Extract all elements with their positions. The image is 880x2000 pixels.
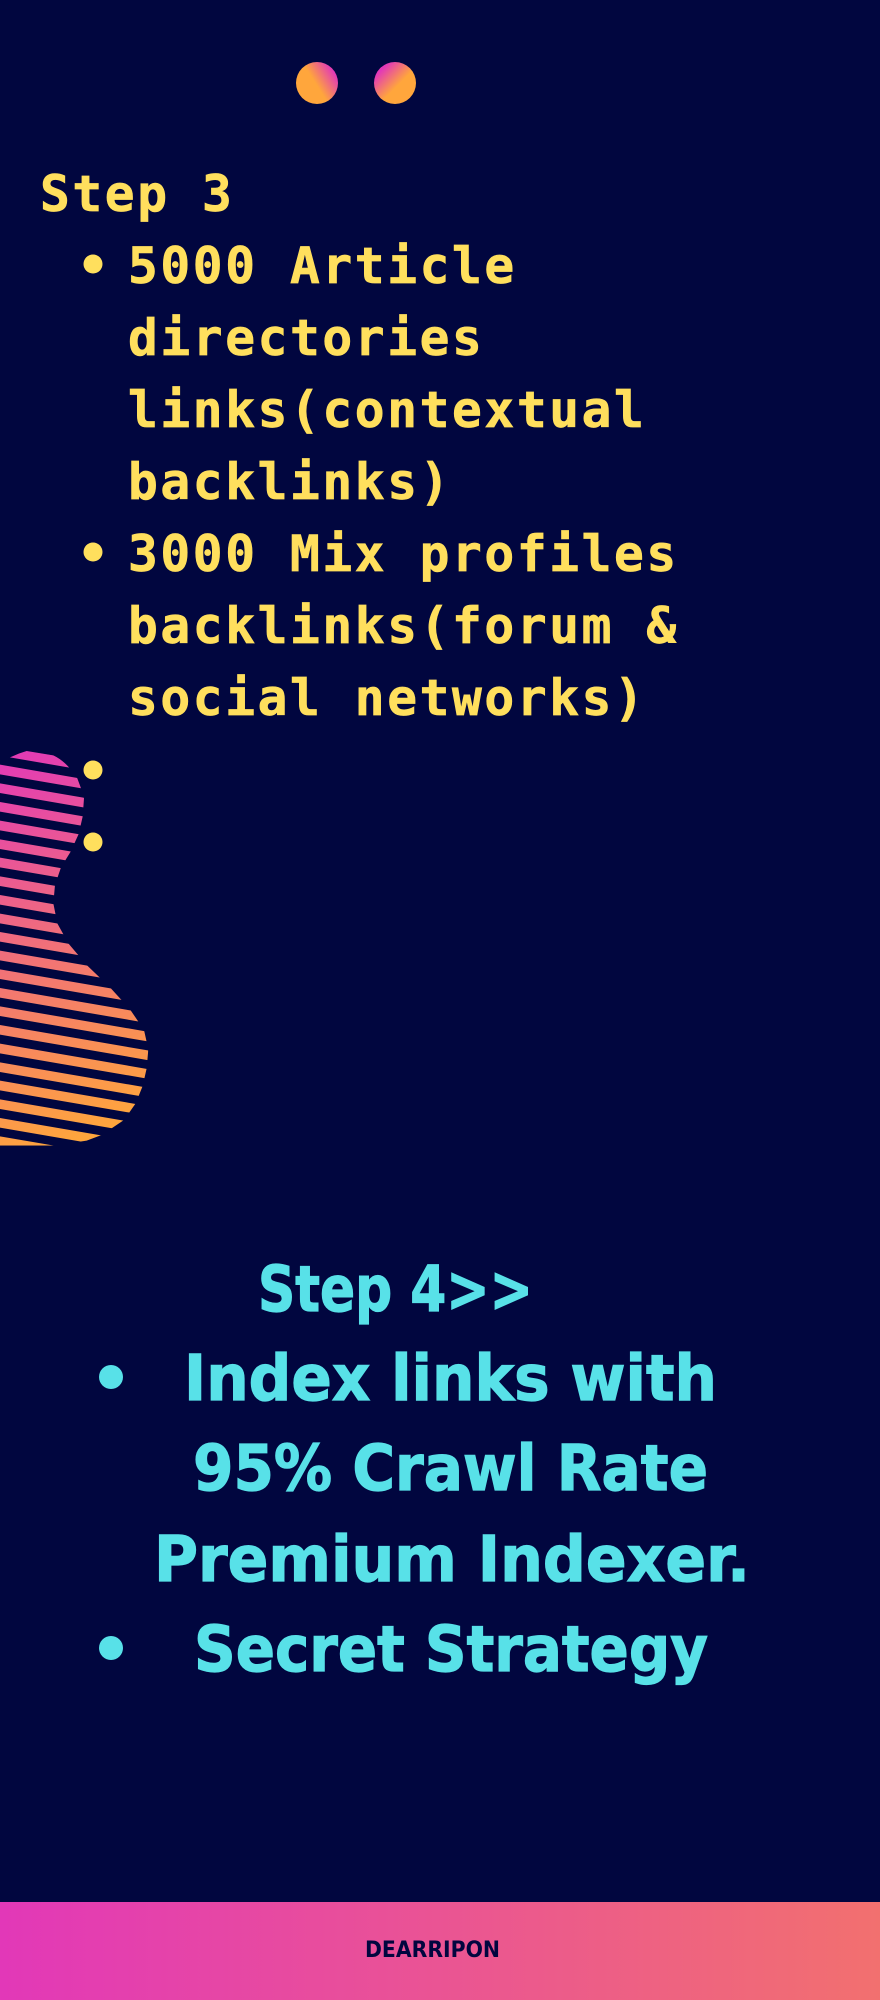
step 3 list: links(contextual <box>128 381 646 439</box>
footer brand name: DEARRIPON <box>365 1938 500 1963</box>
step 3 list: social networks) <box>128 669 646 727</box>
step 3 list <box>84 237 679 852</box>
step 3 list: 3000 Mix profiles <box>128 525 679 583</box>
step 3 panel <box>40 165 679 852</box>
step 4 list <box>99 1342 750 1686</box>
step 3 list: 5000 Article <box>128 237 517 295</box>
step 3 list: directories <box>128 309 484 367</box>
step 4 list: Premium Indexer. <box>154 1523 750 1596</box>
step 3 list: backlinks) <box>128 453 452 511</box>
step 3 heading: Step 3 <box>40 165 234 223</box>
step 4 list: Secret Strategy <box>194 1613 708 1686</box>
step 4 panel <box>99 1253 750 1686</box>
striped gradient blob <box>0 751 148 1146</box>
decorative gradient dots <box>296 62 416 104</box>
step 4 list: 95% Crawl Rate <box>193 1432 708 1505</box>
footer bar <box>0 1902 880 2000</box>
step 4 list: Index links with <box>184 1342 717 1415</box>
step 4 heading: Step 4>> <box>258 1253 533 1326</box>
step 3 list: backlinks(forum & <box>128 597 679 655</box>
